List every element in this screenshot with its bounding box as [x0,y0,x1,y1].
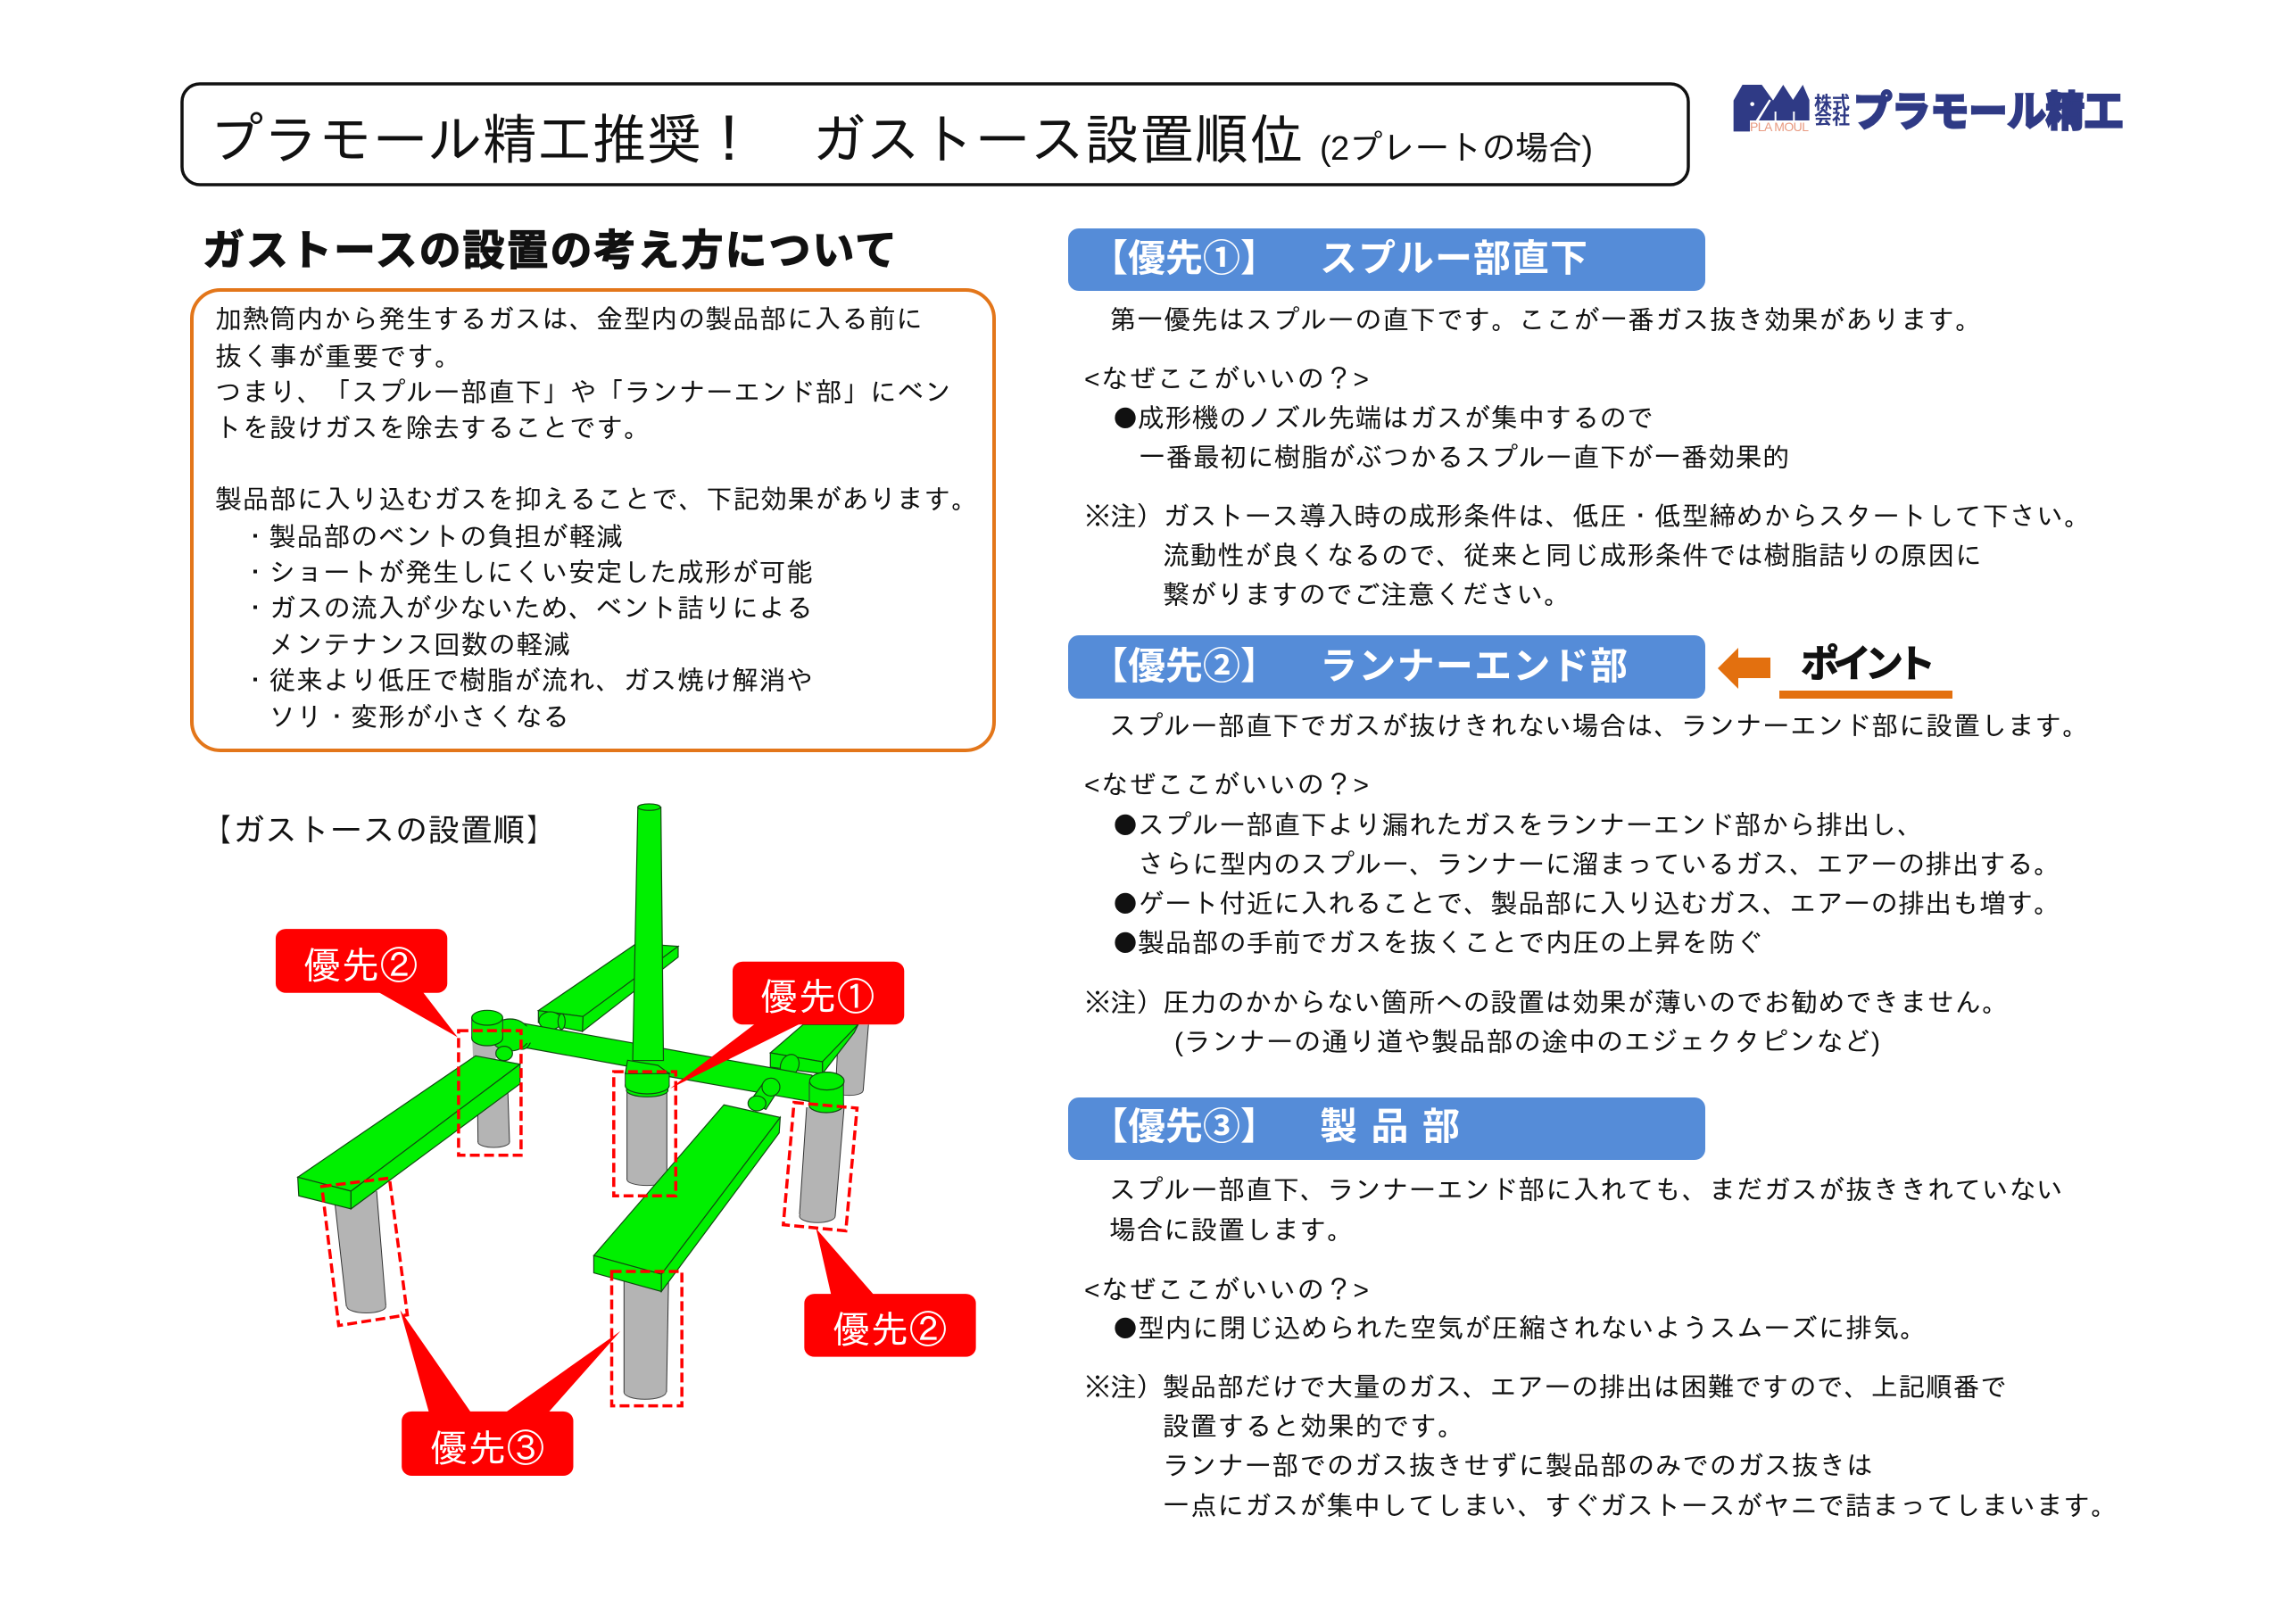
3D model [298,804,868,1406]
title box: (2プレートの場合) [1320,130,1593,168]
title box: プラモール精工推奨！ ガストース設置順位 [209,110,1304,170]
text: priority 3 body: 一点にガスが集中してしまい、すぐガストースがヤニで詰まってしまいます。 [1163,1492,2118,1521]
text: priority 2 body: スプルー部直下より漏れたガスをランナーエンド部から排出し、 [1138,811,1924,840]
callout: priority 2 upper left: 優先② [303,945,418,987]
callout: priority 2 right: 優先② [833,1309,947,1351]
callout: priority 3 [400,1310,620,1476]
panel: concept text box: つまり、「スプルー部直下」や「ランナーエンド部」にベン [215,378,951,408]
heading bar: priority 3: 【優先③】 [1090,1105,1278,1147]
heading bar: priority 1: スプルー部直下 [1320,237,1587,279]
text: priority 2 body: さらに型内のスプルー、ランナーに溜まっているガス、エアーの排出する。 [1138,850,2060,880]
panel: priority 1 sprue [1068,228,2091,610]
text: priority 3 body: ● [1113,1316,1138,1341]
point label: ポイント [1801,643,1935,686]
heading bar: priority 3: 製品部 [1320,1105,1460,1147]
text: priority 2 body: ※注） [1084,989,1163,1018]
text: priority 1 body: ● [1113,406,1138,431]
panel: concept text box: ・製品部のベントの負担が軽減 [242,523,623,552]
heading bar: priority 1 [1068,228,1705,291]
text: priority 3 body: 製品部だけで大量のガス、エアーの排出は困難ですので、上記順番で [1163,1373,2007,1403]
panel: concept text box: ・ショートが発生しにくい安定した成形が可能 [242,559,813,588]
heading bar: priority 2: ランナーエンド部 [1320,645,1628,687]
heading bar: priority 2 [1068,635,1705,699]
panel: concept text box: 抜く事が重要です。 [215,343,461,372]
text: priority 3 body: 設置すると効果的です。 [1163,1412,1464,1442]
title box [182,84,1688,185]
text: priority 3 body: ※注） [1084,1373,1163,1403]
text: priority 1 body: 流動性が良くなるので、従来と同じ成形条件では樹脂詰りの原因に [1163,542,1982,571]
logo: Plamoul Seiko [1734,85,2123,135]
text: priority 1 body: 繋がりますのでご注意ください。 [1163,581,1571,610]
logo: Plamoul Seiko: 会社 [1814,108,1850,128]
label: placement order: 【ガストースの設置順】 [200,812,558,849]
text: priority 2 body: スプルー部直下でガスが抜けきれない場合は、ランナーエンド部に設置します。 [1109,712,2089,741]
point label [1779,643,1952,699]
arrow: pointing to priority 2 [1718,648,1770,689]
text: priority 1 body: 成形機のノズル先端はガスが集中するので [1138,404,1654,434]
text: priority 2 body: ● [1113,891,1138,916]
logo: Plamoul Seiko: プラモール精工 [1853,88,2123,135]
logo: Plamoul Seiko: 株式 [1814,93,1850,113]
panel: concept text box: 製品部に入り込むガスを抑えることで、下記効果があります。 [215,485,978,515]
text: priority 2 body: (ランナーの通り道や製品部の途中のエジェクタピンなど) [1174,1028,1880,1057]
text: priority 2 body: ● [1113,931,1138,956]
panel: concept text box: メンテナンス回数の軽減 [269,631,570,660]
text: priority 1 body: ※注） [1084,502,1163,532]
callout: priority 1 [670,962,904,1089]
heading bar: priority 3 [1068,1097,1705,1160]
text: priority 3 body: 場合に設置します。 [1109,1216,1354,1246]
panel: concept text box [192,290,994,750]
text: priority 2 body [1084,712,2089,1057]
text: priority 3 body: ランナー部でのガス抜きせずに製品部のみでのガス抜きは [1163,1452,1873,1481]
panel: concept text box: ソリ・変形が小さくなる [269,703,569,733]
text: priority 3 body: 型内に閉じ込められた空気が圧縮されないようスムーズに排気。 [1138,1314,1927,1344]
text: priority 1 body [1084,306,2091,610]
logo: Plamoul Seiko: PLA MOUL [1750,120,1809,134]
text: priority 2 body: ● [1113,813,1138,838]
panel: priority 3 product [1068,1097,2118,1521]
text: priority 3 body [1084,1176,2118,1521]
panel: concept text box: ・ガスの流入が少ないため、ベント詰りによる [242,594,813,624]
text: priority 1 body: <なぜここがいいの？> [1084,365,1369,394]
heading bar: priority 2: 【優先②】 [1090,645,1278,687]
text: priority 2 body: <なぜここがいいの？> [1084,771,1369,800]
text: priority 1 body: ガストース導入時の成形条件は、低圧・低型締めからスタートして下さい。 [1163,502,2091,532]
diagram: runner and product 3D model with callouts [276,804,976,1476]
callout: priority 1: 優先① [760,976,874,1018]
text: priority 2 body: 圧力のかからない箇所への設置は効果が薄いのでお勧めできません。 [1163,989,2009,1018]
text: priority 2 body: 製品部の手前でガスを抜くことで内圧の上昇を防ぐ [1138,929,1762,958]
panel: priority 2 runner end [1068,635,2089,1057]
callout: priority 2 upper left [276,929,458,1037]
text: priority 3 body: <なぜここがいいの？> [1084,1276,1369,1305]
text: priority 2 body: ゲート付近に入れることで、製品部に入り込むガス、エアーの排出も増す。 [1138,890,2060,919]
text: priority 1 body: 一番最初に樹脂がぶつかるスプルー直下が一番効果的 [1139,443,1789,473]
panel: concept text box: ・従来より低圧で樹脂が流れ、ガス焼け解消や [242,667,813,696]
heading: concept of gas toss placement: ガストースの設置の考え方について [203,227,897,274]
text: priority 3 body: スプルー部直下、ランナーエンド部に入れても、まだガスが抜ききれていない [1109,1176,2063,1205]
callout: priority 2 right [804,1229,976,1357]
panel: concept text box: トを設けガスを除去することです。 [215,414,651,443]
text: priority 1 body: 第一優先はスプルーの直下です。ここが一番ガス抜き効果があります。 [1109,306,1982,335]
callout: priority 3: 優先③ [430,1428,544,1470]
panel: concept text box: 加熱筒内から発生するガスは、金型内の製品部に入る前に [215,305,923,335]
heading bar: priority 1: 【優先①】 [1090,237,1278,279]
